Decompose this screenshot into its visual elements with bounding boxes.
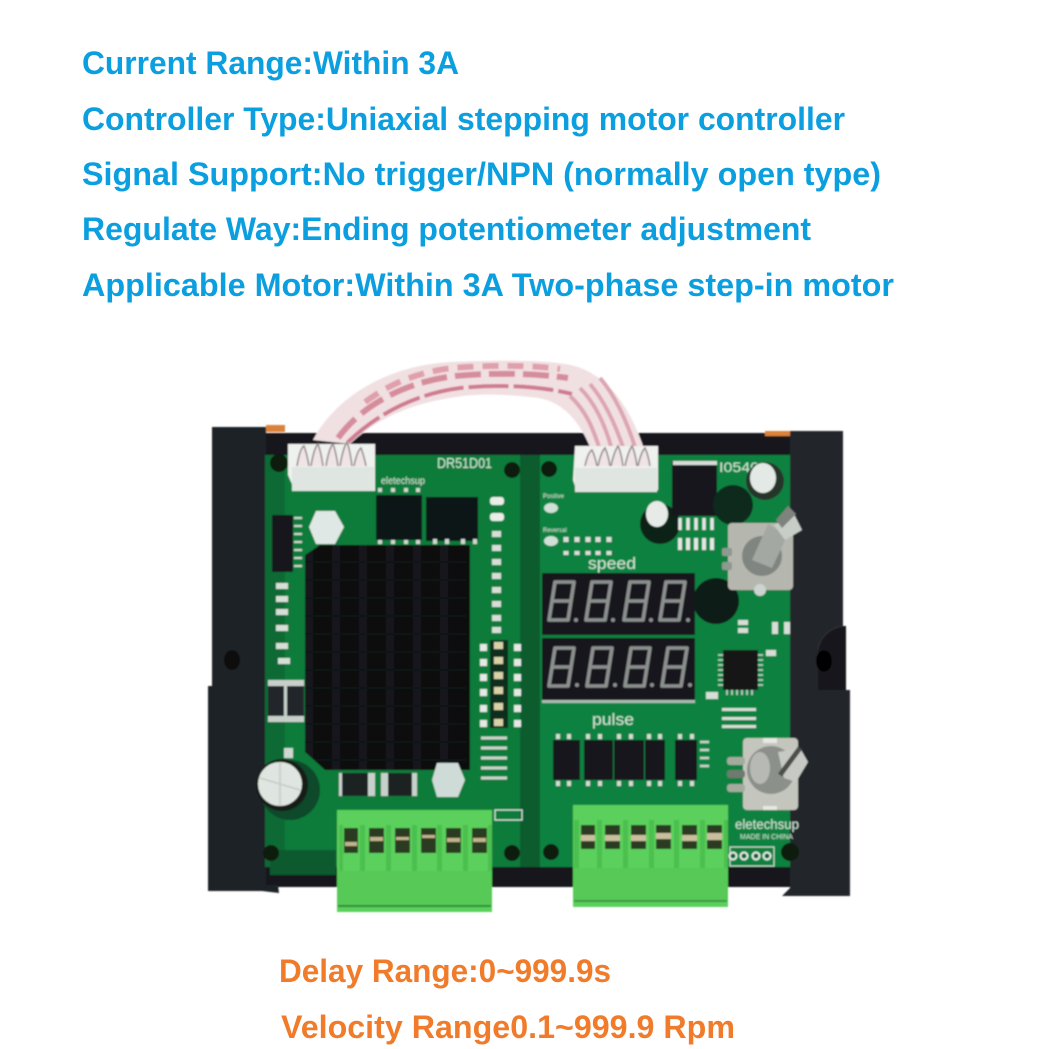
silkscreen labels: eletechsup: [381, 476, 425, 487]
delay and velocity ranges: [279, 953, 735, 1045]
velocity range: Velocity Range0.1~999.9 Rpm: [281, 1009, 735, 1045]
terminal block: right: [573, 805, 728, 907]
silkscreen labels: [381, 455, 799, 841]
spec: regulate way: Regulate Way:Ending potentiometer adjustment: [82, 211, 811, 247]
small components: right: [706, 620, 790, 728]
circuit board: [263, 454, 799, 875]
surface-mount parts column: [276, 497, 504, 664]
connector: left: [288, 442, 375, 491]
electrolytic capacitor: upper right: [746, 462, 784, 500]
microcontroller: [718, 650, 763, 695]
inductor: [693, 578, 739, 624]
enclosure frame: [208, 425, 850, 896]
optocouplers: [553, 734, 709, 786]
connector: right: [573, 446, 658, 492]
hex standoff: upper: [309, 511, 344, 544]
power diodes: bottom: [339, 773, 417, 796]
spec: controller type: Controller Type:Uniaxial stepping motor controller: [82, 101, 845, 137]
spec: applicable motor: Applicable Motor:Within 3A Two-phase step-in motor: [82, 267, 894, 303]
silkscreen labels: pulse: [592, 710, 634, 729]
specification list: [82, 45, 894, 303]
delay range: Delay Range:0~999.9s: [279, 953, 611, 989]
LED display: speed: [542, 573, 695, 635]
silkscreen labels: speed: [588, 554, 636, 573]
silkscreen labels: Reversal: [543, 528, 567, 534]
spec: signal support: Signal Support:No trigger/NPN (normally open type): [82, 156, 881, 192]
spec: current range: Current Range:Within 3A: [82, 45, 459, 81]
silkscreen labels: I0540: [719, 459, 759, 475]
silkscreen labels: MADE IN CHINA: [740, 834, 793, 841]
LED display: pulse: [542, 638, 695, 703]
electrolytic capacitor: centre: [640, 501, 680, 544]
product photo: controller board: [208, 361, 850, 912]
ribbon cable: [313, 361, 645, 452]
header pads: [495, 810, 774, 866]
integrated circuits: left board: [272, 488, 478, 572]
power diodes: left: [268, 680, 304, 722]
hex standoff: lower: [432, 763, 465, 797]
terminal block: left: [337, 810, 492, 912]
potentiometer: upper: [722, 506, 802, 596]
heat sink: [305, 545, 470, 770]
silkscreen labels: Positive: [543, 494, 565, 500]
silkscreen labels: eletechsup: [735, 816, 799, 832]
direction LEDs: [544, 503, 609, 555]
DIP switch array: [480, 640, 521, 778]
silkscreen labels: DR51D01: [437, 455, 492, 472]
potentiometer: lower: [727, 738, 808, 810]
electrolytic capacitor: large: [256, 748, 320, 820]
regulator chip: [672, 461, 753, 550]
